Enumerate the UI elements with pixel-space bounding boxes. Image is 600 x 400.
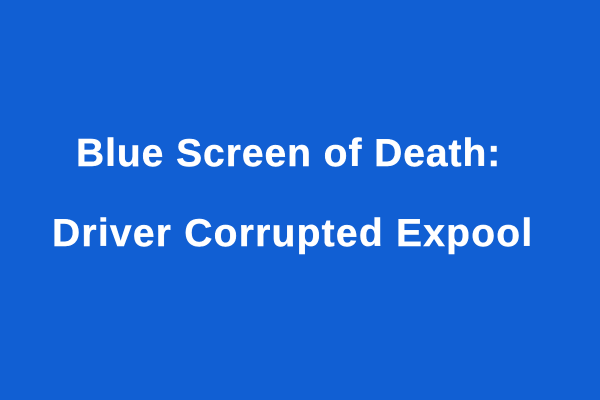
title: line 2: Driver Corrupted Expool xyxy=(52,212,533,255)
title: line 1: Blue Screen of Death: xyxy=(76,132,501,175)
